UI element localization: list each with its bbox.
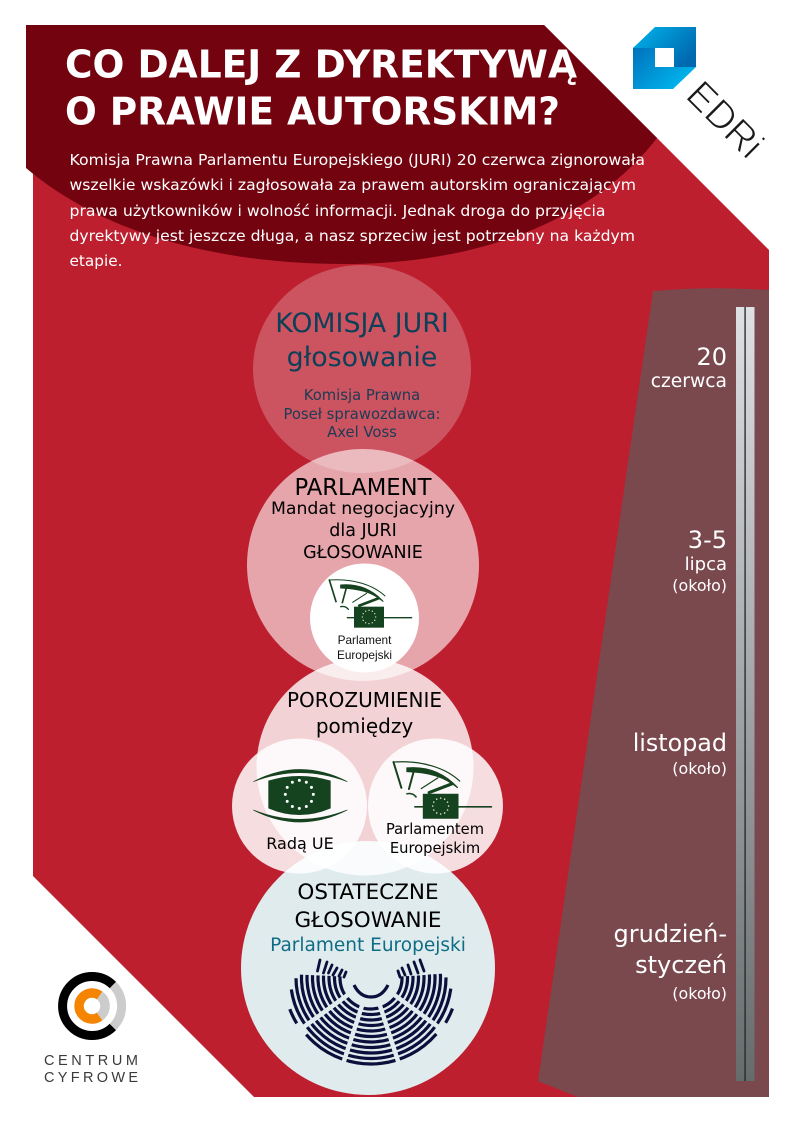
timeline dates: (około)	[672, 984, 727, 1003]
timeline bar	[736, 307, 754, 1081]
JURI text	[275, 308, 449, 441]
Parliament label	[386, 821, 484, 857]
parliament mandate text: Mandat negocjacyjny	[271, 499, 455, 519]
parliament mandate text	[271, 475, 455, 563]
circle: European Parliament logo badge	[310, 564, 419, 672]
circle: Parliament in trilogue	[368, 738, 503, 874]
Parliament label: Europejskim	[390, 840, 480, 857]
dark red header panel	[26, 25, 657, 264]
timeline dates: czerwca	[651, 371, 727, 392]
title: CO DALEJ Z DYREKTYWĄ	[65, 42, 577, 88]
title: O PRAWIE AUTORSKIM?	[65, 90, 560, 134]
timeline dates	[614, 343, 727, 1003]
icon: hemicycle seating chart	[250, 857, 492, 1099]
timeline dates: styczeń	[635, 951, 727, 979]
intro text block	[70, 151, 645, 270]
parliament mandate text: PARLAMENT	[295, 475, 432, 501]
trilogue text: POROZUMIENIE	[287, 688, 442, 712]
Council label: Radą UE	[266, 834, 334, 853]
JURI text: Poseł sprawozdawca:	[283, 406, 441, 423]
final vote text	[270, 880, 466, 956]
European Parliament logo label	[337, 633, 392, 662]
circle: final vote	[241, 841, 495, 1095]
Parliament label: Parlamentem	[386, 821, 484, 838]
circle: trilogue agreement	[256, 658, 474, 876]
intro text block: etapie.	[70, 252, 122, 270]
icon: hemicycle upper seats	[318, 960, 424, 977]
timeline dates: listopad	[633, 729, 727, 757]
icon: European Parliament logo	[329, 580, 412, 628]
timeline dates: grudzień-	[614, 920, 727, 948]
final vote text: GŁOSOWANIE	[294, 908, 442, 933]
final vote text: OSTATECZNE	[297, 880, 439, 905]
final vote text: Parlament Europejski	[270, 935, 466, 956]
intro text block: wszelkie wskazówki i zagłosowała za prawem autorskim ograniczającym	[70, 176, 636, 194]
timeline background	[538, 288, 769, 1097]
circle: JURI committee	[253, 265, 471, 473]
European Parliament logo label: Parlament	[338, 633, 392, 647]
timeline dates: 3-5	[688, 526, 727, 554]
timeline dates: (około)	[672, 576, 727, 595]
circle: Council	[232, 738, 367, 874]
JURI text: głosowanie	[287, 342, 437, 373]
intro text block: Komisja Prawna Parlamentu Europejskiego (JURI) 20 czerwca zignorowała	[70, 151, 645, 169]
logo: Centrum Cyfrowe: CYFROWE	[44, 1070, 138, 1086]
JURI text: KOMISJA JURI	[275, 308, 449, 339]
intro text block: prawa użytkowników i wolność informacji. Jednak droga do przyjęcia	[70, 202, 606, 220]
trilogue text: pomiędzy	[316, 714, 413, 738]
parliament mandate text: GŁOSOWANIE	[303, 543, 423, 563]
icon: hemicycle centre arc	[354, 985, 388, 997]
circle: parliament mandate	[247, 449, 479, 681]
icon: European Parliament logo, large	[393, 762, 491, 819]
title	[65, 42, 577, 134]
timeline dates: (około)	[672, 759, 727, 778]
European Parliament logo label: Europejski	[337, 648, 392, 662]
JURI text: Komisja Prawna	[304, 387, 420, 404]
trilogue text	[287, 688, 442, 738]
parliament mandate text: dla JURI	[329, 521, 397, 541]
icon: Council of the EU logo	[253, 769, 347, 822]
JURI text: Axel Voss	[327, 424, 397, 441]
timeline dates: 20	[696, 343, 727, 371]
logo: Centrum Cyfrowe	[44, 976, 138, 1086]
intro text block: dyrektywy jest jeszcze długa, a nasz sprzeciw jest potrzebny na każdym	[70, 227, 635, 245]
timeline dates: lipca	[685, 554, 727, 575]
logo: EDRi: EDRi	[678, 73, 772, 167]
logo: Centrum Cyfrowe: CENTRUM	[44, 1053, 138, 1069]
logo: EDRi	[633, 27, 772, 167]
